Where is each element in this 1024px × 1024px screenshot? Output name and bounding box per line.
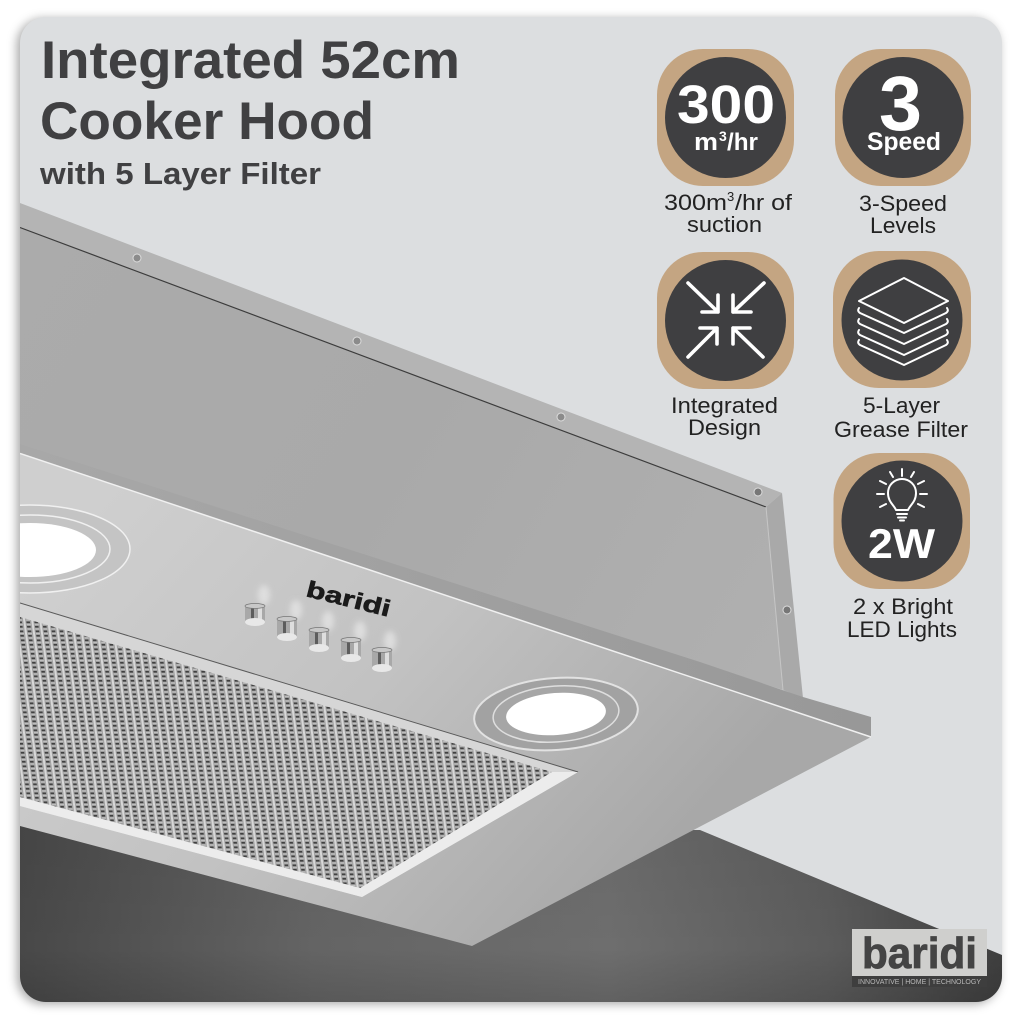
title: Integrated 52cm (41, 31, 460, 90)
underside panel (20, 453, 871, 946)
left LED lamp (20, 504, 131, 594)
badge: 3 speed: Levels (870, 213, 936, 238)
hood back panel (20, 227, 783, 690)
badge: 5-layer grease filter (833, 251, 971, 442)
control buttons (245, 585, 396, 672)
badge: 2W LED lights (834, 453, 970, 642)
dark floor (20, 826, 1002, 1002)
top flange with rivets (20, 203, 782, 507)
icon: stacked layers (858, 278, 948, 365)
badge: 3 speed: 3 (879, 61, 922, 147)
side flange (766, 493, 803, 698)
badge: 3 speed: 3-Speed (859, 191, 947, 216)
brand logo box: INNOVATIVE | HOME | TECHNOLOGY (858, 979, 981, 986)
badge: 5-layer grease filter: Grease Filter (834, 417, 968, 442)
badge: 3 speed (835, 49, 971, 238)
front skirt (20, 444, 871, 737)
filter frame (20, 603, 578, 897)
product photo: cooker hood (0, 203, 1002, 1002)
brand logo on hood: baridi (304, 576, 394, 622)
badge: 300 m3/hr suction (657, 49, 794, 237)
right LED lamp (473, 676, 639, 752)
badge: 300 m3/hr suction: /hr (727, 129, 758, 156)
badge: 300 m3/hr suction: /hr of (735, 190, 793, 215)
badge: 300 m3/hr suction: suction (687, 212, 762, 237)
badge: 3 speed: Speed (867, 128, 941, 156)
badge: 5-layer grease filter: 5-Layer (863, 393, 940, 418)
subtitle: with 5 Layer Filter (39, 156, 321, 191)
badge: integrated design: Integrated (671, 393, 778, 418)
button glare (258, 585, 396, 651)
badge: 300 m3/hr suction: 3 (719, 128, 727, 144)
title: Cooker Hood (40, 92, 374, 151)
icon: light bulb (877, 469, 927, 520)
badge: 300 m3/hr suction: m (694, 129, 718, 156)
title (39, 31, 460, 191)
badge: integrated design: Design (688, 415, 761, 440)
mesh grease filter (20, 617, 552, 888)
badge: integrated design (657, 252, 794, 440)
badge: 2W LED lights: LED Lights (847, 617, 957, 642)
badge: 2W LED lights: 2W (868, 520, 935, 567)
icon: four inward arrows (688, 283, 764, 357)
badge: 2W LED lights: 2 x Bright (853, 594, 953, 619)
badge: 300 m3/hr suction: 300 (677, 75, 775, 135)
badge: 300 m3/hr suction: 300m (664, 190, 727, 215)
badge: 300 m3/hr suction: 3 (727, 189, 734, 204)
brand logo box: baridi (862, 929, 977, 978)
